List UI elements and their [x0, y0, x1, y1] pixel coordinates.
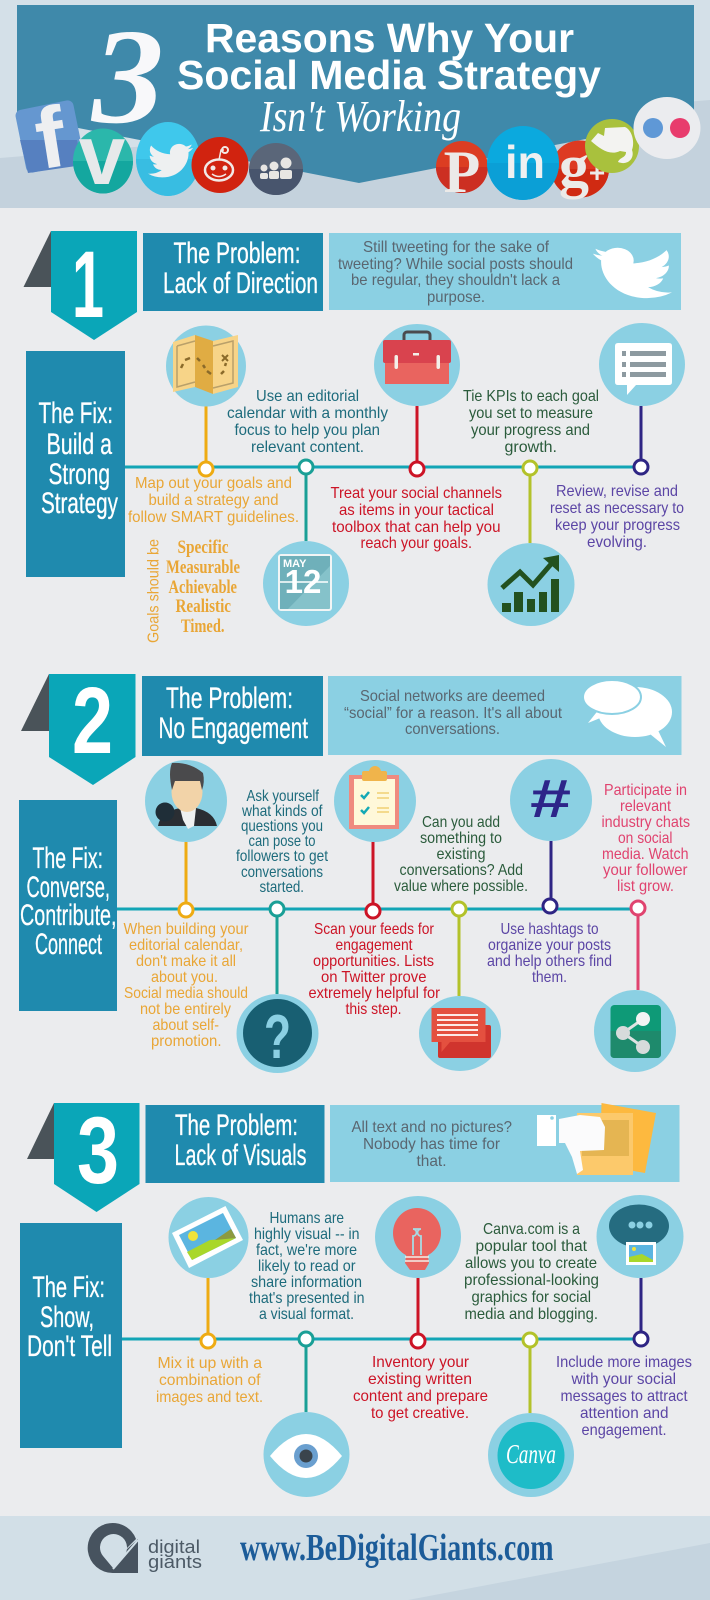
- banner: number 1: [24, 231, 137, 340]
- icon: messages: [419, 996, 501, 1071]
- text: step 2 orange: not be entirely: [140, 1001, 231, 1018]
- heading: problem 2: [142, 676, 323, 756]
- title: Social Media Strategy: [177, 52, 601, 98]
- text: step 2 orange: promotion.: [151, 1033, 222, 1050]
- text: step 2 orange: Social media should: [124, 985, 248, 1002]
- text: step 1 purple: evolving.: [587, 534, 647, 551]
- panel: problem 3 description: that.: [416, 1153, 446, 1170]
- panel: problem 1 description: Still tweeting for the sake of: [363, 239, 550, 256]
- heading: problem 2: No Engagement: [158, 712, 308, 745]
- text: step 3 teal: Humans are: [270, 1210, 344, 1227]
- heading: problem 3: [146, 1105, 324, 1183]
- icon: speech bubbles: [583, 680, 672, 747]
- text: step 3 red: [353, 1354, 488, 1422]
- panel: fix 3: [20, 1223, 122, 1448]
- text: step 1 teal: [227, 388, 388, 456]
- text: step 3 teal: a visual format.: [259, 1306, 354, 1323]
- text: step 3 red: to get creative.: [371, 1405, 469, 1422]
- text: step 1 teal: Use an editorial: [256, 388, 359, 405]
- panel: fix 2: Connect: [35, 928, 102, 961]
- text: step 1 red: reach your goals.: [360, 535, 472, 552]
- panel: problem 1 description: be regular, they shouldn't lack a: [351, 272, 560, 289]
- icon: pinterest: P: [444, 139, 480, 205]
- banner: number 3: [27, 1098, 140, 1212]
- text: step 2 teal: can pose to: [248, 833, 316, 850]
- text: step 2 orange: about self-: [152, 1017, 219, 1034]
- text: step 1 green: growth.: [504, 439, 557, 456]
- panel: problem 3 description: Nobody has time for: [363, 1136, 501, 1153]
- text: step 3 orange: images and text.: [156, 1389, 263, 1406]
- text: step 3 teal: that's presented in: [249, 1290, 364, 1307]
- panel: problem 3 description: All text and no pictures?: [352, 1119, 512, 1136]
- text: step 2 pink: on social: [618, 830, 672, 847]
- panel: fix 3: Show,: [40, 1301, 94, 1334]
- panel: fix 1: Strong: [48, 458, 110, 491]
- text: step 1 green: you set to measure: [469, 405, 593, 422]
- icon: map: [166, 326, 246, 406]
- text: step 2 purple: and help others find: [487, 953, 612, 970]
- section 2: [19, 668, 690, 1073]
- icon: google plus: g: [559, 133, 589, 199]
- icon: facebook: f: [29, 89, 72, 188]
- website url: www.BeDigitalGiants.com: [240, 1527, 554, 1569]
- icon: light bulb: [375, 1196, 461, 1278]
- icon: hashtag: [510, 759, 592, 841]
- logo: digital giants: giants: [148, 1552, 202, 1572]
- logo: digital giants: [88, 1523, 202, 1573]
- text: step 2 green: conversations? Add: [400, 862, 523, 879]
- timeline 3: [122, 1278, 648, 1413]
- text: step 3 teal: fact, we're more: [256, 1242, 357, 1259]
- text: step 3 green: Canva.com is a: [483, 1221, 580, 1238]
- text: step 2 purple: organize your posts: [488, 937, 611, 954]
- heading: problem 1: [143, 233, 323, 311]
- banner: number 2: 2: [72, 668, 113, 774]
- text: step 3 red: content and prepare: [353, 1388, 488, 1405]
- text: step 3 teal: highly visual -- in: [254, 1226, 360, 1243]
- text: step 2 pink: industry chats: [602, 814, 690, 831]
- text: step 1 purple: keep your progress: [555, 517, 680, 534]
- title: [90, 2, 601, 152]
- text: step 2 red: Scan your feeds for: [314, 921, 435, 938]
- text: smart list: Specific: [178, 537, 228, 558]
- icon: question mark: [236, 994, 318, 1073]
- text: step 3 green: media and blogging.: [464, 1306, 598, 1323]
- panel: problem 1 description: tweeting? While social posts should: [338, 256, 573, 273]
- text: step 2 red: this step.: [346, 1001, 402, 1018]
- text: smart list: Measurable: [166, 557, 240, 578]
- text: step 1 orange: build a strategy and: [148, 492, 278, 509]
- panel: fix 1: [26, 351, 125, 577]
- timeline 2: [117, 841, 645, 996]
- icon: eye: [264, 1412, 350, 1497]
- text: step 3 green: [464, 1221, 599, 1323]
- text: step 1 teal: calendar with a monthly: [227, 405, 388, 422]
- icon: flickr: [634, 97, 700, 159]
- icon: picture: [168, 1197, 248, 1278]
- icon: twitter: [136, 122, 200, 196]
- text: step 2 pink: [602, 782, 690, 895]
- text: smart list: [166, 537, 240, 637]
- footer: [0, 1516, 710, 1600]
- text: step 2 pink: media. Watch: [602, 846, 688, 863]
- text: step 3 red: Inventory your: [372, 1354, 470, 1371]
- section 1: [24, 231, 685, 643]
- text: step 2 green: existing: [436, 846, 486, 863]
- logo: digital giants: digital: [148, 1537, 200, 1557]
- icon: share: [594, 990, 676, 1072]
- text: step 2 teal: conversations: [241, 864, 323, 881]
- text: step 3 red: existing written: [368, 1371, 472, 1388]
- text: step 2 pink: your follower: [603, 862, 688, 879]
- text: step 2 red: on Twitter prove: [321, 969, 427, 986]
- panel: problem 2 description: conversations.: [405, 721, 500, 738]
- panel: fix 2: [19, 800, 117, 1011]
- text: step 1 green: [463, 388, 599, 456]
- text: goals should be: Goals should be: [146, 539, 162, 643]
- text: step 1 orange: Map out your goals and: [135, 475, 292, 492]
- icon: calendar: MAY: [283, 558, 307, 570]
- text: step 3 orange: combination of: [159, 1372, 261, 1389]
- panel: problem 1 description: [329, 233, 681, 310]
- icon: hashtag: #: [529, 769, 570, 829]
- text: step 3 orange: Mix it up with a: [158, 1355, 262, 1372]
- panel: fix 3: Don't Tell: [27, 1330, 112, 1363]
- text: step 1 purple: [550, 483, 684, 551]
- panel: fix 1: Build a: [46, 428, 112, 461]
- text: step 2 teal: started.: [260, 879, 304, 896]
- icon: twitter bird: [593, 248, 672, 298]
- panel: problem 2 description: Social networks are deemed: [360, 688, 545, 705]
- text: smart list: Timed.: [181, 616, 224, 637]
- icon: clipboard: [334, 760, 416, 842]
- icon: speech list: [599, 323, 685, 406]
- icon: reddit: [192, 137, 248, 193]
- title: 3: [90, 2, 164, 152]
- text: step 2 red: [308, 921, 441, 1018]
- heading: problem 1: Lack of Direction: [163, 267, 318, 300]
- heading: problem 3: Lack of Visuals: [174, 1139, 306, 1172]
- text: step 1 green: your progress and: [471, 422, 590, 439]
- section 3: [20, 1098, 692, 1497]
- text: step 3 green: professional-looking: [464, 1272, 599, 1289]
- text: step 2 red: engagement: [336, 937, 413, 954]
- text: step 3 purple: with your social: [571, 1371, 676, 1388]
- text: step 3 teal: likely to read or: [258, 1258, 356, 1275]
- heading: problem 3: The Problem:: [175, 1109, 298, 1142]
- panel: problem 2 description: “social” for a reason. It's all about: [344, 705, 563, 722]
- panel: fix 2: Converse,: [26, 871, 110, 904]
- icon: google plus: [551, 133, 609, 199]
- text: step 2 teal: followers to get: [236, 848, 328, 865]
- text: step 3 purple: attention and: [580, 1405, 668, 1422]
- text: step 1 teal: relevant content.: [251, 439, 364, 456]
- text: step 3 orange: [156, 1355, 263, 1406]
- icon: vimeo: v: [79, 108, 126, 202]
- icon: person: [145, 760, 227, 842]
- text: step 2 pink: list grow.: [617, 878, 674, 895]
- heading: problem 1: The Problem:: [174, 237, 300, 270]
- text: step 3 green: popular tool that: [476, 1238, 588, 1255]
- icon: calendar: 12: [285, 563, 321, 600]
- text: step 2 red: opportunities. Lists: [313, 953, 434, 970]
- icon: calendar: [263, 541, 349, 626]
- text: step 1 red: toolbox that can help you: [332, 519, 500, 536]
- text: step 3 purple: [556, 1354, 692, 1439]
- text: step 3 teal: share information: [251, 1274, 362, 1291]
- icon: growth chart: [488, 543, 574, 626]
- text: step 1 purple: Review, revise and: [556, 483, 678, 500]
- text: step 2 purple: [487, 921, 612, 986]
- text: step 2 orange: [124, 921, 249, 1050]
- text: step 3 purple: engagement.: [582, 1422, 666, 1439]
- heading: problem 2: The Problem:: [166, 682, 293, 715]
- icon: chat with image: [596, 1195, 684, 1278]
- text: step 2 green: [394, 814, 528, 895]
- text: step 2 orange: don't make it all: [136, 953, 236, 970]
- icon: canva: [488, 1413, 574, 1497]
- text: step 2 orange: editorial calendar,: [129, 937, 243, 954]
- banner: number 2: [21, 668, 136, 785]
- text: smart list: Realistic: [176, 596, 231, 617]
- icon: linkedin: [487, 126, 559, 200]
- text: step 2 teal: questions you: [241, 818, 323, 835]
- icon: google plus: +: [589, 157, 605, 188]
- banner: number 1: 1: [72, 232, 104, 338]
- title: Isn't Working: [259, 92, 461, 141]
- icon: linkedin: in: [505, 136, 545, 188]
- icon: canva: Canva: [506, 1439, 556, 1469]
- panel: fix 2: The Fix:: [32, 842, 103, 875]
- icon: toolbox: [374, 324, 460, 406]
- text: step 2 red: extremely helpful for: [308, 985, 441, 1002]
- icon: question mark: ?: [264, 1003, 291, 1072]
- text: step 2 orange: about you.: [151, 969, 218, 986]
- text: step 1 purple: reset as necessary to: [550, 500, 684, 517]
- text: step 1 red: as items in your tactical: [339, 502, 494, 519]
- panel: problem 2 description: [328, 676, 682, 755]
- panel: fix 1: Strategy: [41, 487, 118, 520]
- banner: number 3: 3: [77, 1098, 119, 1204]
- text: step 2 green: Can you add: [422, 814, 500, 831]
- text: step 2 pink: relevant: [620, 798, 671, 815]
- panel: fix 3: The Fix:: [32, 1271, 105, 1304]
- icon: facebook: [14, 89, 85, 188]
- text: smart list: Achievable: [168, 577, 237, 598]
- text: step 2 purple: them.: [532, 969, 567, 986]
- timeline 1: [125, 406, 648, 543]
- text: step 3 purple: Include more images: [556, 1354, 692, 1371]
- text: step 2 pink: Participate in: [604, 782, 687, 799]
- text: step 2 green: something to: [420, 830, 502, 847]
- text: step 2 purple: Use hashtags to: [500, 921, 599, 938]
- icon: group: [249, 143, 303, 195]
- icon: thumbs down on photos: [537, 1103, 656, 1175]
- text: step 1 orange: follow SMART guidelines.: [128, 509, 299, 526]
- text: step 3 green: allows you to create: [465, 1255, 597, 1272]
- panel: problem 1 description: purpose.: [427, 289, 485, 306]
- text: step 2 teal: Ask yourself: [246, 788, 319, 805]
- text: step 2 teal: what kinds of: [241, 803, 323, 820]
- text: step 3 green: graphics for social: [472, 1289, 591, 1306]
- text: step 3 purple: messages to attract: [560, 1388, 688, 1405]
- text: step 1 red: Treat your social channels: [330, 485, 502, 502]
- text: step 2 orange: When building your: [124, 921, 249, 938]
- panel: problem 3 description: [330, 1103, 680, 1182]
- text: step 1 green: Tie KPIs to each goal: [463, 388, 599, 405]
- text: step 1 orange: [128, 475, 299, 526]
- header panel: [0, 0, 710, 208]
- text: step 1 red: [330, 485, 502, 552]
- title: Reasons Why Your: [205, 15, 574, 61]
- panel: fix 2: Contribute,: [20, 899, 116, 932]
- icon: evernote: [585, 119, 639, 173]
- panel: fix 1: The Fix:: [38, 397, 113, 430]
- text: step 1 teal: focus to help you plan: [234, 422, 380, 439]
- text: step 2 teal: [236, 788, 328, 896]
- text: step 3 teal: [249, 1210, 364, 1323]
- text: step 2 green: value where possible.: [394, 878, 528, 895]
